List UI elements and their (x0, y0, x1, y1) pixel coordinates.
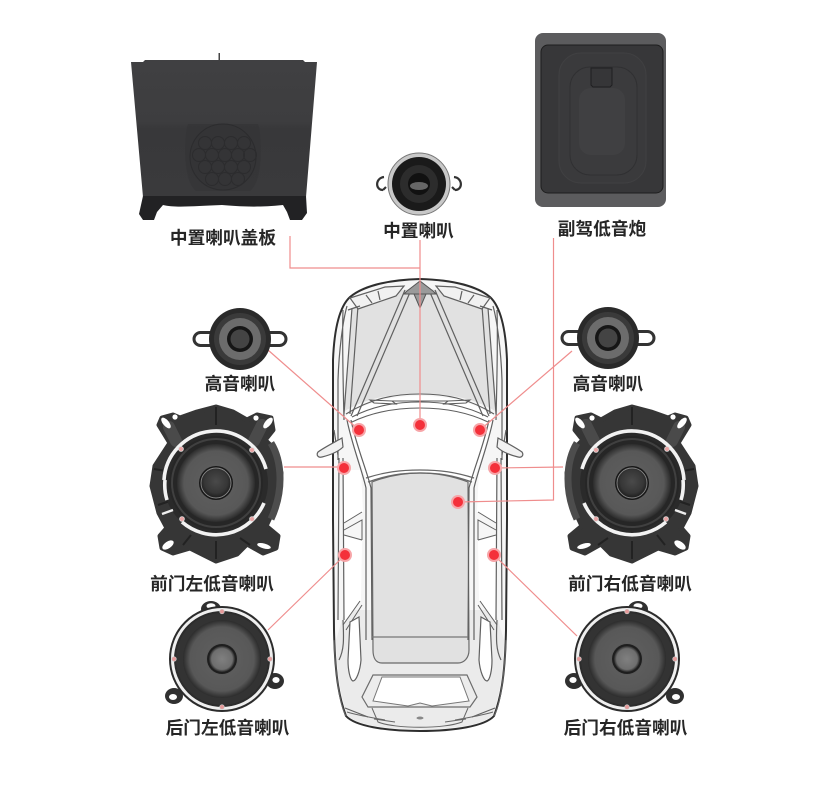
speaker position dots (337, 418, 502, 562)
front left door speaker (152, 407, 281, 561)
cover bottom bracket (139, 196, 307, 220)
car details right (429, 286, 523, 717)
car body outline (333, 279, 507, 731)
connector lines (268, 236, 577, 636)
rear body shading (336, 610, 504, 729)
roof rear line (372, 636, 468, 638)
roof (372, 473, 469, 663)
side windows (344, 470, 496, 622)
panel: car top view (317, 279, 523, 731)
hood emblem (404, 281, 436, 308)
passenger subwoofer (535, 33, 666, 207)
right tweeter (562, 307, 654, 369)
label: 高音喇叭 right: 高音喇叭 (573, 373, 644, 394)
roof front edge (366, 470, 474, 482)
windshield (346, 396, 494, 482)
center speaker cover panel (131, 53, 317, 220)
wiper band (346, 394, 494, 422)
label: 中置喇叭盖板: 中置喇叭盖板 (170, 227, 276, 248)
label: 前门右低音喇叭: 前门右低音喇叭 (568, 573, 692, 594)
left tweeter (194, 308, 286, 370)
label: 前门左低音喇叭: 前门左低音喇叭 (150, 573, 274, 594)
label: 后门右低音喇叭: 后门右低音喇叭 (564, 717, 688, 738)
rear bumper (347, 708, 493, 727)
center speaker (377, 153, 461, 215)
rear left door speaker (165, 601, 284, 712)
hood (343, 288, 497, 412)
label: 后门左低音喇叭: 后门左低音喇叭 (166, 717, 290, 738)
rear window (362, 675, 477, 707)
label: 高音喇叭 left: 高音喇叭 (205, 373, 276, 394)
front right door speaker (567, 407, 696, 561)
cover speaker grille (190, 124, 256, 190)
car details left (317, 286, 411, 717)
label: 副驾低音炮: 副驾低音炮 (558, 218, 647, 239)
label: 中置喇叭: 中置喇叭 (383, 221, 454, 241)
rear right door speaker (565, 601, 684, 712)
